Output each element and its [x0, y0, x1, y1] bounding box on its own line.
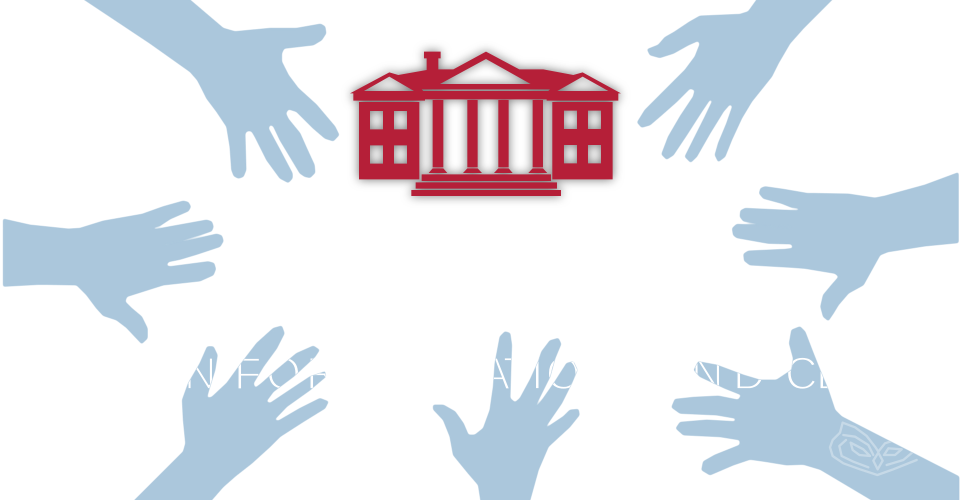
roof with pediments: [350, 52, 621, 101]
icon: owl logo watermark: [830, 423, 917, 475]
heading: white title text visible only over the hands: [188, 358, 828, 389]
icon: hand top left: [70, 0, 339, 183]
heading: white title text visible only over the hands: ND: [691, 348, 766, 399]
icon: university building: [350, 52, 621, 196]
icon: hand bottom left: [125, 326, 328, 500]
entrance steps: [411, 174, 561, 196]
icon: hand top right: [637, 0, 840, 162]
columns with bases: [429, 100, 547, 173]
icon: hand right: [732, 173, 958, 321]
icon: hand bottom right: [672, 327, 959, 500]
right wing with windows: [552, 102, 613, 179]
heading: white title text visible only over the hands: CL: [785, 348, 841, 399]
icon: hand left: [3, 201, 223, 344]
heading: white title text visible only over the hands: INFOR: [167, 348, 338, 399]
heading: white title text visible only over the hands: ATIO: [480, 348, 581, 399]
icon: hand bottom center: [433, 332, 579, 500]
left wing with windows: [359, 102, 419, 179]
